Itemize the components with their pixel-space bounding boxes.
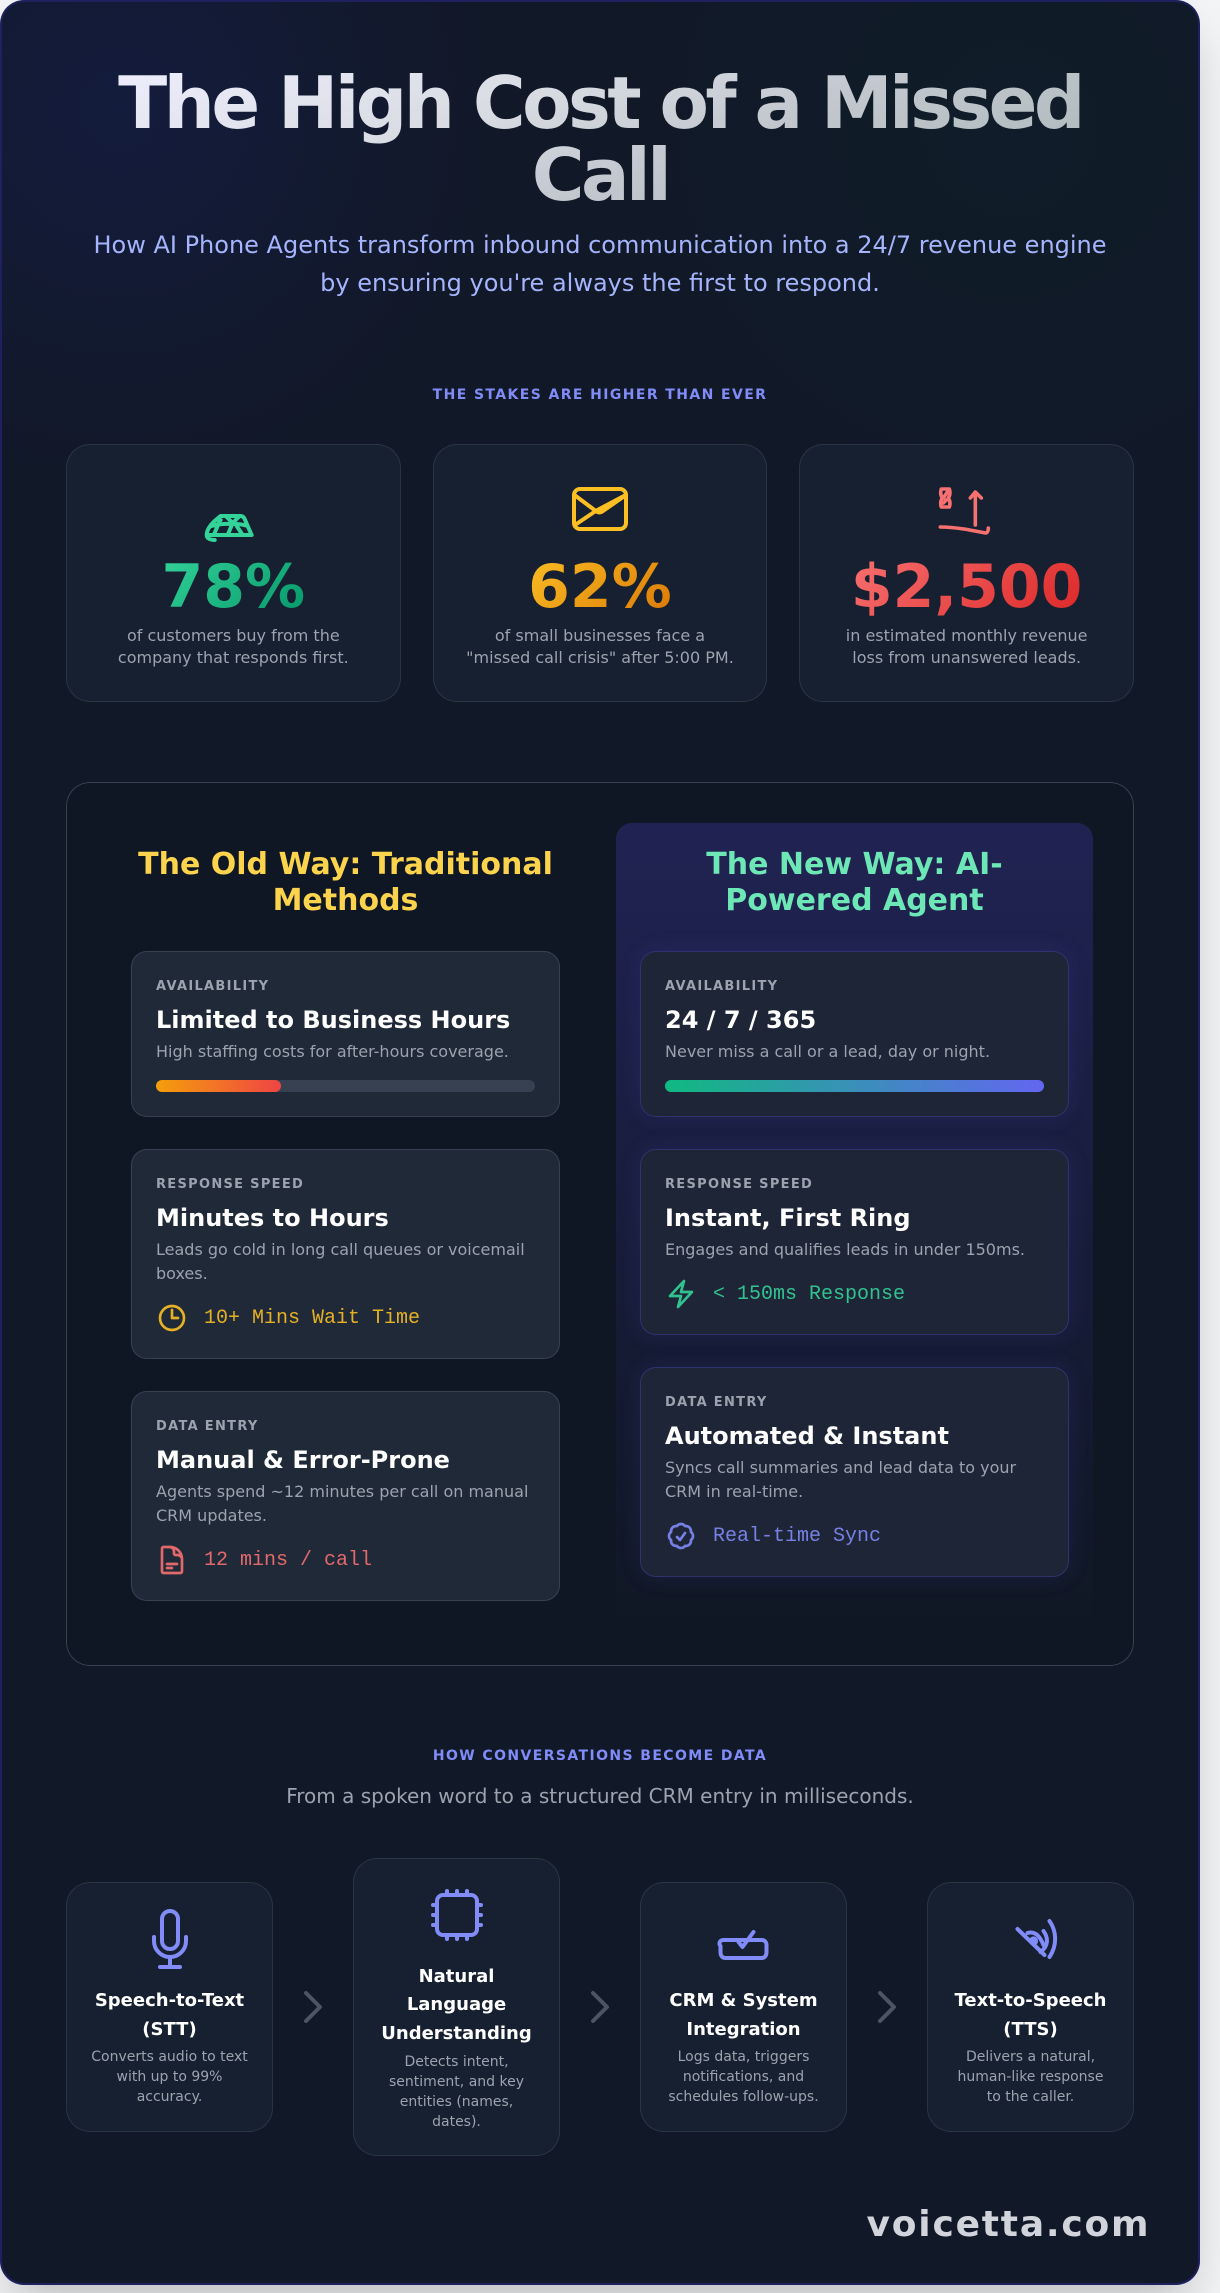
- panel: stat $2,500: [799, 444, 1134, 702]
- step title: (STT): [142, 2019, 197, 2040]
- step title: Language: [407, 1994, 506, 2015]
- stat description: loss from unanswered leads.: [852, 648, 1081, 667]
- description: [665, 1458, 1016, 1501]
- description: Syncs call summaries and lead data to your: [665, 1458, 1016, 1477]
- step title: [381, 1966, 532, 2044]
- column: old way: [131, 847, 560, 1601]
- description: [156, 1482, 528, 1525]
- label: DATA ENTRY: [665, 1395, 768, 1410]
- subtitle: by ensuring you're always the first to respond.: [320, 269, 880, 297]
- subtitle: [93, 231, 1107, 297]
- heading: new way: The New Way: AI-: [706, 847, 1003, 882]
- step title: Integration: [686, 2019, 801, 2040]
- description: CRM updates.: [156, 1506, 267, 1525]
- heading: new way: [706, 847, 1003, 918]
- title: Call: [532, 132, 668, 216]
- step title: [95, 1990, 244, 2040]
- description: Engages and qualifies leads in under 150ms.: [665, 1240, 1025, 1259]
- heading: old way: [138, 847, 553, 918]
- card: old data entry: [131, 1391, 560, 1601]
- step description: with up to 99%: [116, 2069, 222, 2085]
- icon: badge check: [668, 1522, 694, 1550]
- label: AVAILABILITY: [665, 979, 778, 994]
- stat number: $2,500: [851, 552, 1082, 622]
- description: Agents spend ~12 minutes per call on manual: [156, 1482, 528, 1501]
- step description: [91, 2049, 248, 2105]
- panel: speech-to-text: [66, 1882, 273, 2132]
- stat description: [846, 626, 1088, 667]
- step description: Converts audio to text: [91, 2049, 248, 2065]
- icon: green broken outline: [204, 514, 254, 542]
- description: Leads go cold in long call queues or voicemail: [156, 1240, 525, 1259]
- icon: bolt: [668, 1280, 694, 1308]
- step description: human-like response: [958, 2069, 1103, 2085]
- value: 24 / 7 / 365: [665, 1006, 816, 1034]
- step description: [958, 2049, 1103, 2105]
- section label: process: HOW CONVERSATIONS BECOME DATA: [433, 1748, 767, 1764]
- section label: stakes: THE STAKES ARE HIGHER THAN EVER: [433, 387, 767, 403]
- description: [156, 1240, 525, 1283]
- stat description: company that responds first.: [118, 648, 349, 667]
- metric: 10+ Mins Wait Time: [204, 1307, 420, 1330]
- brand footer: voicetta.com: [866, 2204, 1150, 2245]
- panel: stat 62%: [433, 444, 767, 702]
- description: High staffing costs for after-hours coverage.: [156, 1042, 509, 1061]
- step description: schedules follow-ups.: [668, 2089, 819, 2105]
- step title: Natural: [419, 1966, 494, 1987]
- step title: Understanding: [381, 2023, 532, 2044]
- icon: crm broken tray: [717, 1930, 768, 1960]
- panel: comparison: [66, 782, 1134, 1666]
- panel: text-to-speech: [927, 1882, 1134, 2132]
- arrow: [304, 1990, 322, 2023]
- stat description: in estimated monthly revenue: [846, 626, 1088, 645]
- step description: notifications, and: [683, 2069, 804, 2085]
- label: RESPONSE SPEED: [156, 1177, 304, 1192]
- title: [66, 66, 1134, 210]
- panel: crm integration: [640, 1882, 847, 2132]
- panel: natural language understanding: [353, 1858, 560, 2156]
- description: boxes.: [156, 1264, 208, 1283]
- label: DATA ENTRY: [156, 1419, 259, 1434]
- value: Manual & Error-Prone: [156, 1446, 450, 1474]
- icon: microphone: [152, 1909, 188, 1969]
- step description: Detects intent,: [404, 2054, 509, 2070]
- label: RESPONSE SPEED: [665, 1177, 813, 1192]
- description: CRM in real-time.: [665, 1482, 803, 1501]
- heading: new way: Powered Agent: [725, 883, 984, 918]
- step description: sentiment, and key: [389, 2074, 524, 2090]
- step title: CRM & System: [669, 1990, 818, 2011]
- section subtitle: process: From a spoken word to a structured CRM entry in milliseconds.: [286, 1784, 914, 1808]
- icon: envelope: [572, 487, 628, 531]
- stat number: 78%: [162, 552, 305, 622]
- card: old availability: [131, 951, 560, 1117]
- step description: dates).: [432, 2114, 481, 2130]
- icon: red broken arrow: [938, 487, 990, 535]
- stat description: of small businesses face a: [495, 626, 705, 645]
- title: The High Cost of a Missed: [118, 60, 1082, 144]
- metric: < 150ms Response: [713, 1283, 905, 1306]
- progress bar 33%: [156, 1080, 535, 1092]
- stat description: "missed call crisis" after 5:00 PM.: [466, 648, 734, 667]
- metric: Real-time Sync: [713, 1525, 881, 1548]
- step title: [669, 1990, 818, 2040]
- progress bar 100%: [665, 1080, 1044, 1092]
- description: Never miss a call or a lead, day or night.: [665, 1042, 990, 1061]
- step title: [954, 1990, 1106, 2040]
- icon: document: [160, 1546, 184, 1574]
- step description: entities (names,: [400, 2094, 513, 2110]
- stat description: of customers buy from the: [127, 626, 340, 645]
- subtitle: How AI Phone Agents transform inbound communication into a 24/7 revenue engine: [93, 231, 1107, 259]
- value: Minutes to Hours: [156, 1204, 389, 1232]
- step description: Delivers a natural,: [966, 2049, 1095, 2065]
- card: new availability: [640, 951, 1069, 1117]
- step title: Speech-to-Text: [95, 1990, 244, 2011]
- card: old response speed: [131, 1149, 560, 1359]
- arrow: [878, 1990, 896, 2023]
- heading: old way: The Old Way: Traditional: [138, 847, 553, 882]
- step title: (TTS): [1003, 2019, 1058, 2040]
- value: Limited to Business Hours: [156, 1006, 510, 1034]
- stat description: [118, 626, 349, 667]
- stat description: [466, 626, 734, 667]
- step description: [668, 2049, 819, 2105]
- icon: clock: [158, 1304, 186, 1332]
- step description: [389, 2054, 524, 2130]
- step title: Text-to-Speech: [954, 1990, 1106, 2011]
- card: new response speed: [640, 1149, 1069, 1335]
- column: new way: [616, 823, 1093, 1625]
- card: new data entry: [640, 1367, 1069, 1577]
- metric: 12 mins / call: [204, 1549, 372, 1572]
- step description: accuracy.: [137, 2089, 202, 2105]
- step description: to the caller.: [987, 2089, 1074, 2105]
- value: Automated & Instant: [665, 1422, 949, 1450]
- icon: chip: [431, 1889, 483, 1941]
- stat number: 62%: [528, 552, 672, 622]
- value: Instant, First Ring: [665, 1204, 911, 1232]
- heading: old way: Methods: [273, 883, 418, 918]
- step description: Logs data, triggers: [678, 2049, 809, 2065]
- icon: broken speaker: [1015, 1918, 1058, 1960]
- panel: stat 78%: [66, 444, 401, 702]
- label: AVAILABILITY: [156, 979, 269, 994]
- arrow: [591, 1990, 609, 2023]
